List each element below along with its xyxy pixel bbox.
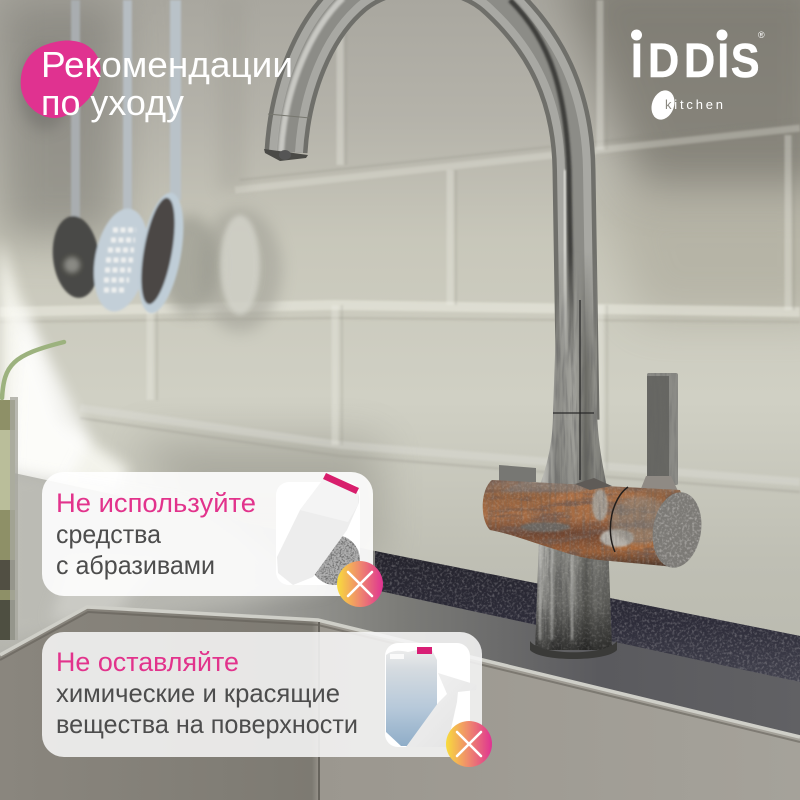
card heading: Не оставляйте: [56, 647, 239, 677]
x badge: [337, 561, 383, 607]
logo: iDDiS kitchen: ®: [758, 30, 765, 40]
skimmer: [86, 0, 156, 316]
card text: средства: [56, 519, 162, 549]
base ring: [530, 641, 617, 659]
logo: iDDiS kitchen: [631, 30, 765, 123]
wordmark: IDDIS: [631, 34, 760, 88]
card panel: [42, 632, 482, 757]
card: do not leave chemicals: [42, 632, 492, 767]
faucet: [264, 0, 705, 660]
x badge: [446, 721, 492, 767]
title block: [21, 41, 293, 123]
pink blob: [21, 41, 101, 118]
card text: с абразивами: [56, 550, 215, 580]
thumbnail: canister and spray bottle: [385, 643, 477, 747]
logo: iDDiS kitchen: kitchen: [665, 97, 723, 112]
brushed lower neck and body: [535, 262, 612, 650]
pan: [131, 0, 191, 317]
glass with plant: [0, 342, 64, 640]
card text: химические и красящие: [56, 678, 340, 708]
thumbnail: abrasive powder and scourer: [276, 473, 365, 590]
end cap: [652, 492, 702, 568]
hanging utensils: [49, 0, 260, 317]
card: do not use abrasives: [42, 472, 383, 607]
card text: [56, 678, 358, 739]
sunlight patch: [0, 240, 130, 620]
title text: по уходу: [41, 82, 184, 123]
ladle: [49, 0, 103, 300]
card panel: [42, 472, 373, 596]
stone backsplash strip: [375, 551, 800, 682]
card text: [56, 519, 215, 580]
small left handle: [499, 465, 536, 482]
kitchen circle mark: [648, 87, 678, 123]
aerator tip: [264, 114, 310, 161]
long lever handle: [640, 373, 678, 491]
card text: вещества на поверхности: [56, 709, 358, 739]
title text: Рекомендации: [41, 44, 293, 85]
counter: [0, 470, 800, 800]
title text: [41, 44, 293, 123]
neck junction over mixer: [575, 478, 612, 490]
groove: [610, 487, 628, 552]
rusty mixer cylinder: [482, 480, 681, 566]
soft wall shadow behind utensils: [198, 208, 282, 332]
tile joints on the wall: [0, 0, 800, 492]
reflected shadow skimmer: [220, 215, 260, 315]
sink: [0, 607, 800, 800]
gooseneck tube: [281, 0, 578, 420]
card heading: Не используйте: [56, 488, 256, 518]
